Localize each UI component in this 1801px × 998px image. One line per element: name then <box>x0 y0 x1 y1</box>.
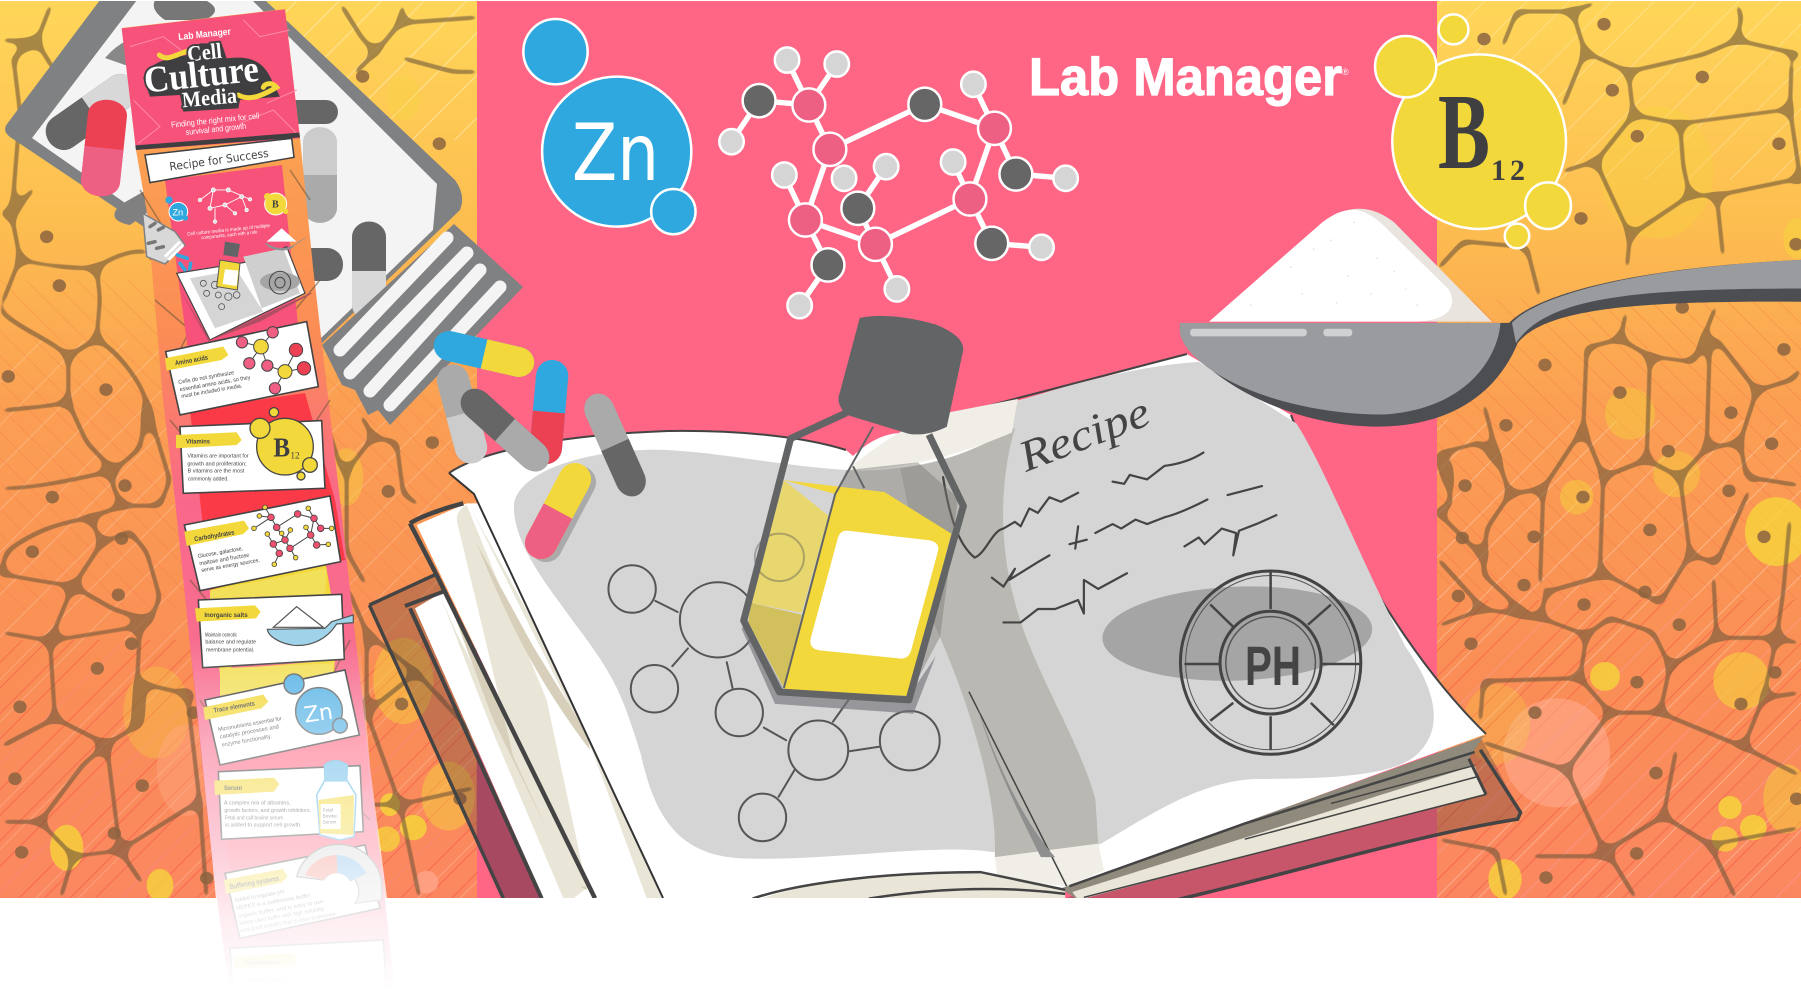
strip subtitle: Finding the right mix for cell <box>170 110 260 130</box>
capsule shadow <box>536 467 596 562</box>
page stack bottom right <box>1061 736 1486 900</box>
sachet crimped seal <box>322 224 523 425</box>
title backing shape <box>143 43 280 112</box>
illustration: zinc atom <box>523 19 696 234</box>
illustration: spoon with powder <box>1180 209 1801 427</box>
card: serum: growth factors, and growth inhibitors. <box>224 808 311 814</box>
capsule: yellow and pink <box>524 463 592 559</box>
card: inorganic salts: membrane potential. <box>206 647 255 653</box>
card: buffering systems: and good stability that is easy to prepare. <box>240 911 338 934</box>
right cell nuclei <box>1452 18 1801 884</box>
card: vitamins: Vitamins are important for <box>187 453 249 459</box>
card: carbohydrates: Carbohydrates <box>194 529 235 543</box>
card: carbohydrates <box>184 496 341 591</box>
card: vitamins: B vitamins are the most <box>188 469 245 475</box>
card: amino acids: must be included in media. <box>181 383 243 400</box>
card: trace elements: catalytic processes and <box>219 724 279 741</box>
left cell walls <box>0 3 480 900</box>
card: vitamins: B <box>273 433 290 463</box>
illustration: vitamin B12 <box>1375 14 1571 248</box>
book back cover and page stacks <box>369 503 680 898</box>
strip banner <box>145 138 294 183</box>
mini hero: book <box>177 228 312 341</box>
strip white fade overlay <box>150 640 400 998</box>
strip title <box>142 38 261 112</box>
flask cap <box>838 316 963 434</box>
strip banner: Recipe for Success <box>168 146 270 174</box>
capsules inside sachet <box>39 0 386 320</box>
strip title: Cell <box>186 38 223 66</box>
card: serum <box>214 761 363 840</box>
capsule: light grey <box>436 364 488 464</box>
gutter shading <box>900 428 1098 858</box>
illustration: vitamin B12: 12 <box>1491 154 1525 187</box>
card: vitamins: 12 <box>290 451 300 461</box>
card: serum: Bovine <box>323 814 337 819</box>
card: carbohydrates: serve as energy sources. <box>201 558 261 574</box>
card: amino acids <box>165 322 318 415</box>
strip title: Media <box>181 83 238 112</box>
card: carbohydrates: Glucose, galactose, <box>197 546 244 560</box>
card: amino acids: Cells do not synthesize <box>178 370 235 386</box>
hand-drawn molecule sketch <box>608 565 940 841</box>
card: serum: Fetal and calf bovine serum <box>225 815 283 821</box>
card: inorganic salts: balance and regulate <box>205 640 256 646</box>
card: trace elements: Trace elements <box>213 700 256 715</box>
card: serum: is added to support cell growth. <box>225 823 302 829</box>
left page grey blob <box>514 450 995 859</box>
logo: Lab Manager: Lab Manager <box>1029 48 1342 107</box>
illustration: culture flask <box>741 316 963 714</box>
card: vitamins <box>176 408 325 493</box>
mini hero: atoms <box>165 193 288 221</box>
capsule: dark and grey <box>460 388 550 472</box>
left cell nuclei <box>2 70 467 884</box>
card: inorganic salts: Maintain osmotic <box>205 632 237 638</box>
card: supplements: support growth <box>245 984 282 990</box>
card: trace elements: Micronutrients essential for <box>218 716 282 733</box>
card: serum: Serum <box>323 820 336 825</box>
title swirls <box>159 52 277 98</box>
logo: Lab Manager: ® <box>1342 67 1349 77</box>
card: buffering systems: widely used buffer with high solubility <box>238 906 325 927</box>
card: vitamins: commonly added. <box>188 476 229 482</box>
yellow band <box>210 568 327 599</box>
capsule: grey and dark <box>584 394 646 496</box>
card: inorganic salts: Inorganic salts <box>204 612 248 619</box>
handwritten recipe notes <box>943 453 1276 622</box>
card: serum: Fetal <box>323 808 333 813</box>
pH wheel sketch <box>1099 571 1375 754</box>
flask shadow <box>741 623 936 714</box>
spoon bowl and handle <box>1180 259 1801 427</box>
mini hero: molecule <box>198 188 252 223</box>
card: buffering systems <box>224 844 382 938</box>
white page spread <box>449 354 1486 898</box>
card: vitamins: growth and proliferation; <box>187 461 247 467</box>
right page grey blob <box>1012 362 1434 845</box>
handwritten heading: Recipe <box>1011 387 1157 482</box>
illustration: open recipe book <box>369 354 1521 902</box>
page stack bottom left <box>608 565 1065 902</box>
falling capsules <box>431 328 651 568</box>
card: buffering systems: organic buffer, and is easy to use <box>238 899 324 920</box>
strip logo: Lab Manager <box>178 27 232 43</box>
mini hero: atoms: B <box>272 199 279 210</box>
capsule: blue and yellow <box>434 331 534 377</box>
card: supplements: Additional nutrients <box>245 978 293 984</box>
card: supplements <box>230 940 387 998</box>
card: inorganic salts <box>195 594 353 668</box>
pH wheel sketch: PH <box>1245 634 1301 697</box>
strip colour bands <box>165 165 300 365</box>
card: supplements: Supplements <box>244 960 281 967</box>
card: trace elements: enzyme functionality. <box>221 734 273 749</box>
card: trace elements <box>203 670 359 765</box>
card: trace elements: Zn <box>302 700 335 729</box>
card: buffering systems: HEPES is a zwitterionic buffer <box>236 893 311 912</box>
sachet body <box>5 0 462 345</box>
flask label <box>810 531 938 659</box>
card: serum: Serum <box>224 785 242 792</box>
strip background <box>122 9 395 997</box>
capsule: blue and red <box>528 359 570 465</box>
right cell walls <box>1437 3 1801 900</box>
strip header <box>122 9 300 150</box>
card: amino acids: Amino acids <box>174 355 209 367</box>
card: buffering systems: Added to regulate pH <box>234 889 285 904</box>
card: amino acids: essential amino acids, so they <box>179 375 251 393</box>
mini hero: caption: Cell culture media is made up of multiple <box>187 223 271 238</box>
panel: left cell texture background <box>0 0 480 901</box>
powder pile <box>1209 209 1492 322</box>
illustration: white molecule <box>719 47 1078 318</box>
illustration: vitamin B12: B <box>1438 73 1490 192</box>
card: buffering systems: Buffering systems <box>229 874 280 891</box>
panel: infographic preview strip <box>122 9 400 998</box>
illustration: capsule sachet <box>5 0 523 425</box>
mini hero: caption: components, each with a role <box>201 229 258 241</box>
panel: central pink background <box>477 1 1437 898</box>
mini hero: sachet <box>143 213 192 278</box>
illustration: zinc atom: Zn <box>572 109 659 199</box>
flask liquid <box>784 480 951 696</box>
flask glass outline <box>744 413 963 700</box>
yellow band <box>220 663 333 697</box>
strip subtitle: survival and growth <box>185 121 247 137</box>
panel: right cell texture background <box>1430 0 1801 900</box>
card: carbohydrates: maltose and fructose <box>199 553 250 567</box>
mini hero: atoms: Zn <box>172 207 183 217</box>
card: vitamins: Vitamins <box>186 439 210 446</box>
right cover <box>1061 736 1521 900</box>
gutter crease <box>969 692 1067 886</box>
strip title: Culture <box>142 49 261 102</box>
strip subtitle <box>170 110 260 137</box>
card: serum: A complex mix of albumins, <box>224 801 291 807</box>
